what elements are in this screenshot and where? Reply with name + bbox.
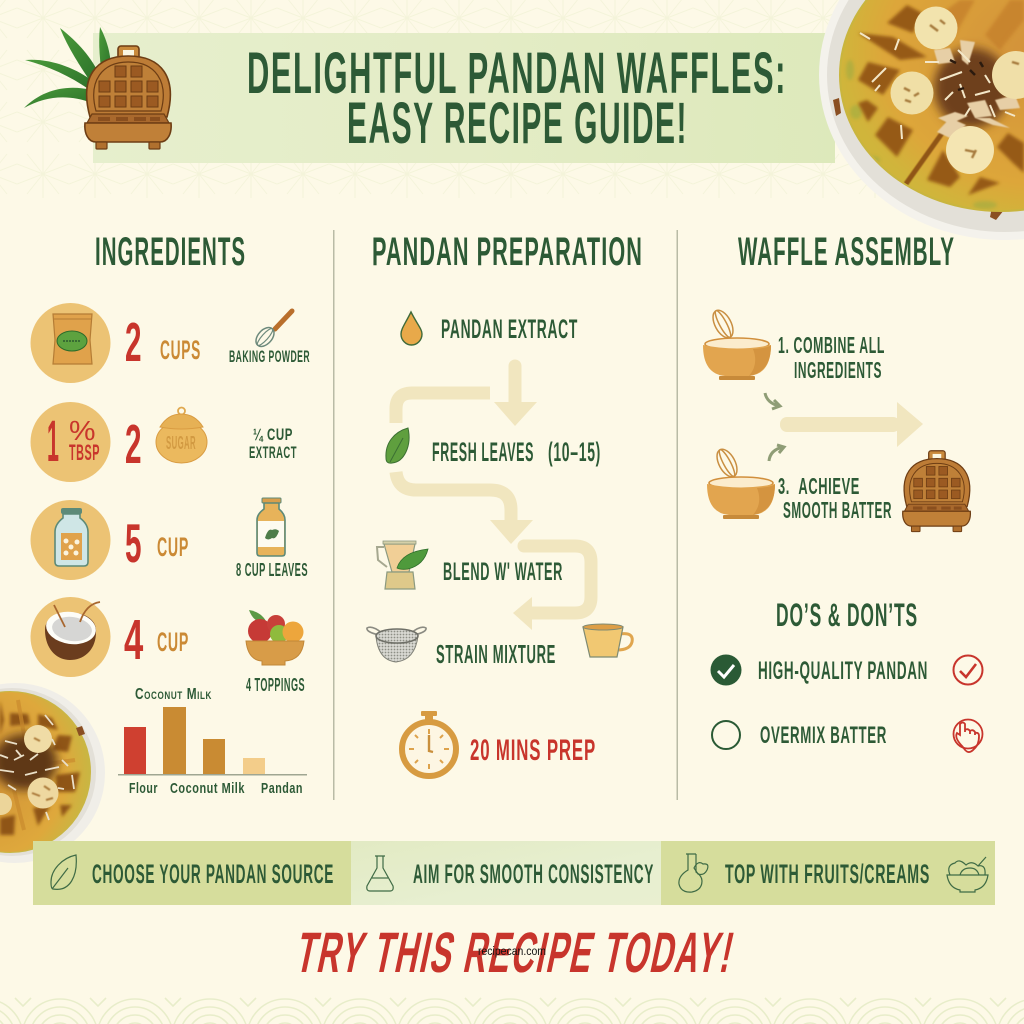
title: EASY RECIPE GUIDE! bbox=[347, 91, 688, 156]
row 4 bbox=[30, 597, 305, 695]
row 2: ¼ CUP bbox=[253, 425, 293, 444]
row 2: % bbox=[69, 415, 97, 446]
icon: strainer bbox=[367, 627, 426, 662]
panel: pandan preparation: 20 MINS PREP bbox=[470, 734, 596, 767]
heading: pandan preparation: PANDAN PREPARATION bbox=[372, 230, 643, 274]
icon: filled check bbox=[710, 654, 742, 686]
icon: leaf bbox=[386, 428, 409, 463]
heading: ingredients: INGREDIENTS bbox=[95, 230, 246, 274]
panel: pandan preparation: BLEND W' WATER bbox=[443, 558, 563, 586]
panel: pandan preparation: FRESH LEAVES bbox=[432, 437, 534, 467]
panel: pandan preparation: PANDAN EXTRACT bbox=[441, 314, 578, 344]
panel: waffle assembly: SMOOTH BATTER bbox=[783, 497, 892, 523]
big arrow bbox=[780, 402, 923, 447]
tip 2: AIM FOR SMOOTH CONSISTENCY bbox=[413, 859, 654, 889]
tips banner bbox=[33, 841, 995, 905]
row 1: CUPS bbox=[160, 335, 201, 365]
divider bbox=[333, 230, 334, 800]
panel: pandan preparation bbox=[367, 230, 643, 776]
row 3: CUP bbox=[157, 532, 189, 562]
photo: waffle plate left bbox=[0, 683, 105, 863]
row 2: 1 bbox=[47, 409, 60, 474]
panel: waffle assembly: INGREDIENTS bbox=[794, 357, 882, 383]
row 2: TBSP bbox=[69, 440, 100, 465]
row 1: BAKING POWDER bbox=[229, 347, 310, 366]
icon: waffle iron bbox=[85, 46, 171, 149]
icon: drop bbox=[401, 312, 422, 345]
row 4: 4 bbox=[124, 608, 145, 672]
bar chart bbox=[118, 686, 307, 797]
bar chart: Coconut Milk bbox=[170, 780, 245, 797]
flow arrows bbox=[396, 366, 591, 630]
panel: pandan preparation: STRAIN MIXTURE bbox=[436, 639, 556, 669]
icon: small arrow bbox=[769, 445, 784, 461]
tip 3 bbox=[661, 841, 995, 905]
icon: waffle iron bbox=[903, 451, 970, 532]
row 2: SUGAR bbox=[166, 433, 196, 453]
row 1 bbox=[30, 303, 310, 383]
title bbox=[247, 41, 787, 156]
icon: hand bbox=[954, 720, 982, 752]
panel: pandan preparation: (10–15) bbox=[548, 437, 601, 467]
icon: pandan leaves bbox=[24, 27, 111, 108]
tip 2 bbox=[351, 841, 661, 905]
row 1: 2 bbox=[125, 311, 143, 373]
row 4: CUP bbox=[157, 627, 189, 657]
icon: stopwatch bbox=[402, 711, 456, 776]
panel: waffle assembly: 3. ACHIEVE bbox=[778, 473, 860, 499]
icon: red check bbox=[954, 656, 982, 684]
title banner bbox=[93, 33, 835, 163]
bar chart: Pandan bbox=[261, 780, 303, 797]
panel: ingredients bbox=[30, 230, 310, 797]
icon: bowl and whisk bbox=[707, 446, 775, 519]
bottom wave pattern bbox=[0, 997, 1024, 1024]
icon: cup bbox=[583, 624, 632, 657]
bar chart: Flour bbox=[129, 780, 158, 797]
row 2: EXTRACT bbox=[249, 443, 297, 462]
icon: blender bbox=[377, 541, 428, 589]
row 4: 4 TOPPINGS bbox=[246, 675, 305, 695]
row 2 bbox=[30, 402, 297, 482]
panel: dos and donts: OVERMIX BATTER bbox=[760, 722, 887, 749]
photo: waffle plate top right bbox=[819, 0, 1024, 240]
icon: bowl and whisk bbox=[703, 307, 771, 380]
bar chart: Coconut Milk bbox=[135, 686, 212, 703]
icon: open circle bbox=[712, 721, 740, 749]
row 3 bbox=[30, 498, 308, 580]
row 3: 8 CUP LEAVES bbox=[236, 560, 308, 580]
panel: waffle assembly: 1. COMBINE ALL bbox=[778, 332, 885, 358]
tip 1 bbox=[33, 841, 351, 905]
icon: small arrow bbox=[765, 393, 780, 409]
divider bbox=[676, 230, 678, 800]
panel: waffle assembly bbox=[703, 230, 970, 532]
top pattern band bbox=[0, 0, 1024, 198]
row 3: 5 bbox=[125, 512, 143, 574]
panel: dos and donts bbox=[710, 597, 982, 752]
watermark: recipecan.com bbox=[478, 946, 546, 958]
tip 1: CHOOSE YOUR PANDAN SOURCE bbox=[92, 859, 334, 889]
row 2: 2 bbox=[125, 413, 143, 475]
